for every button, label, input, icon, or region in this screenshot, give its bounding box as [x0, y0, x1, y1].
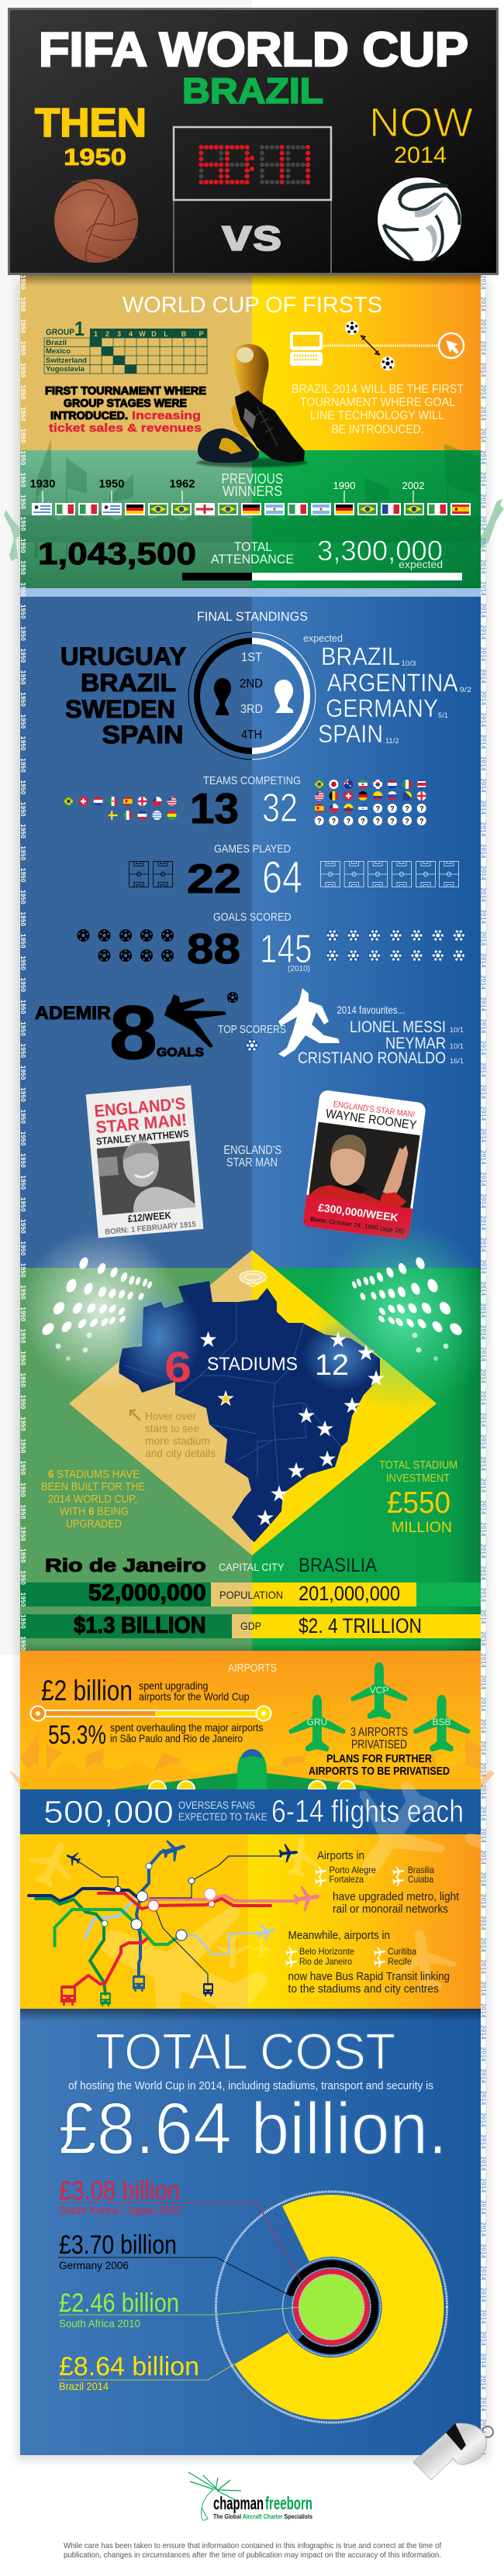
stat: total attendance: 3,300,000: [317, 535, 443, 567]
group table: Yugoslavia: [46, 365, 85, 373]
card: stanley matthews: BORN: 1 FEBRUARY 1915: [105, 1221, 197, 1237]
text: 3 airports privatised: PLANS FOR FURTHER: [326, 1752, 432, 1765]
band: overseas fans: EXPECTED TO TAKE: [178, 1810, 267, 1823]
planes: privatised airports: GRU: [307, 1717, 327, 1727]
heading: england's star man: STAR MAN: [226, 1156, 278, 1169]
row: population: POPULATION: [219, 1589, 283, 1601]
stat: 2 billion: [41, 1675, 250, 1706]
2014 expected standings: 9/2: [460, 686, 471, 694]
icon: 1950 leather football: [54, 179, 138, 263]
chart label: 2.46 billion: South Africa 2010: [59, 2317, 140, 2330]
row: capital city: CAPITAL CITY: [219, 1561, 285, 1573]
icon: stadium: [240, 1271, 266, 1286]
stat: games 22: 22: [187, 856, 241, 902]
timeline of winner flags: 1962: [169, 477, 195, 491]
label: then 1950: 1950: [64, 143, 126, 170]
group table: 4: [129, 330, 133, 338]
logo mark: [188, 2472, 241, 2520]
hover hint: more stadium: [145, 1434, 210, 1447]
heading: top scorers: [218, 1023, 286, 1052]
band: overseas fans: [20, 1789, 481, 1834]
metro plane icons: [64, 1835, 321, 1944]
chart label: 3.70 billion: [58, 2230, 292, 2296]
text: airports with bus rapid transit: Curitiba: [388, 1946, 416, 1957]
text: 3 airports privatised: PRIVATISED: [351, 1738, 407, 1751]
text: first tournament group stages: Increasing: [132, 409, 201, 422]
arms outside panel: [4, 498, 504, 561]
planes: privatised airports: BSB: [432, 1717, 451, 1727]
row: population: 52,000,000: [88, 1580, 206, 1606]
stadium location stars: ★: [356, 1341, 376, 1365]
stat: goals 88: [78, 925, 240, 973]
top scorers 2014: [278, 988, 464, 1067]
stat: goals 145: [260, 927, 465, 973]
2014 expected standings: expected: [303, 632, 343, 644]
floodlight glows: [19, 1221, 492, 1414]
stat: 2 billion: airports for the World Cup: [139, 1690, 250, 1703]
text: 3 airports privatised: [309, 1726, 450, 1778]
stat: 55.3 percent: [48, 1720, 264, 1750]
icon: computer goal-line technology: [290, 321, 464, 370]
timeline of winner flags: 1990: [333, 480, 355, 491]
text: airports with bus rapid transit: Belo Horizonte: [299, 1946, 354, 1957]
card: wayne rooney: ENGLAND'S STAR MAN!: [333, 1100, 416, 1120]
text: airports with metro: Brasilia: [408, 1865, 434, 1875]
group table: B: [181, 330, 187, 338]
text: 3 airports privatised: AIRPORTS TO BE PRIVATISED: [309, 1765, 450, 1778]
text: brazil 2014 goal line technology: [292, 383, 464, 436]
standings circle: [188, 632, 316, 759]
text: airports with metro: rail or monorail networks: [333, 1903, 448, 1916]
panel: stadiums: [19, 1221, 492, 1651]
stat: stadiums 6 vs 12: 12: [315, 1349, 349, 1382]
heading: world cup of firsts: WORLD CUP OF FIRSTS: [123, 293, 382, 318]
chart label: 8.64 billion: £8.64 billion: [59, 2352, 199, 2381]
planes: privatised airports: [288, 1662, 470, 1751]
standings circle: 3RD: [240, 703, 263, 716]
group table: 1: [74, 317, 85, 340]
stat: total stadium investment: INVESTMENT: [386, 1472, 450, 1485]
floodlights: [40, 1256, 464, 1361]
group table: L: [164, 330, 168, 338]
group table: Switzerland: [46, 356, 87, 364]
2014 expected standings: GERMANY: [326, 694, 438, 722]
metro map lines: [29, 1847, 296, 1994]
timeline of winner flags: 1950: [99, 477, 124, 491]
top scorers 2014: 2014 favourites...: [337, 1004, 405, 1016]
card: stanley matthews: STAR MAN!: [95, 1110, 188, 1137]
stat: 55.3 percent: in São Paulo and Rio de Janeiro: [110, 1732, 243, 1744]
2014 expected standings: 5/1: [438, 711, 448, 719]
stat: 2 billion: £2 billion: [41, 1675, 133, 1706]
2014 expected standings: [303, 632, 471, 748]
card: wayne rooney: Born: October 24, 1985 (age 28): [310, 1216, 405, 1235]
bus icons: [60, 1975, 213, 2006]
top scorers 2014: NEYMAR: [385, 1035, 446, 1052]
stat: teams 32: [262, 780, 426, 831]
stadium location stars: ★: [296, 1403, 316, 1427]
top scorers 2014: CRISTIANO RONALDO: [298, 1049, 446, 1067]
chart label: 8.64 billion: [58, 2352, 235, 2392]
stat: total attendance: ATTENDANCE: [211, 552, 294, 567]
chart label: 3.08 billion: £3.08 billion: [59, 2176, 180, 2206]
stat: total stadium investment: [379, 1458, 457, 1536]
logo: chapman freeborn: [188, 2472, 312, 2520]
hover hint: stars to see: [145, 1422, 199, 1434]
logo: chapman freeborn: The Global Aircraft Charter Specialists: [213, 2513, 312, 2520]
band: overseas fans: 6-14 flights each: [271, 1793, 464, 1829]
panel: world cup of firsts: [20, 275, 481, 450]
logo: chapman freeborn: freeborn: [265, 2493, 312, 2513]
text: airports with metro: Airports in: [317, 1849, 364, 1862]
row: gdp: $2. 4 TRILLION: [299, 1614, 422, 1638]
text: first tournament group stages: [45, 384, 206, 435]
stat: 55.3 percent: spent overhauling the major airports: [110, 1721, 264, 1734]
text: brazil 2014 goal line technology: TOURNAMENT WHERE GOAL: [300, 396, 455, 409]
standings circle: 4TH: [241, 728, 262, 742]
heading: total cost: TOTAL COST: [95, 2023, 395, 2080]
heading: previous winners: [222, 471, 283, 499]
stat: total stadium investment: TOTAL STADIUM: [379, 1458, 457, 1472]
text: 6 stadiums built: WITH 6 BEING: [60, 1505, 129, 1518]
stat: goals 145: (2010): [288, 965, 310, 973]
stat: total attendance: TOTAL: [234, 539, 272, 554]
1950 final standings: SPAIN: [102, 721, 183, 749]
text: airports with bus rapid transit: Rio de Janeiro: [299, 1956, 352, 1967]
2014 expected standings: 11/2: [385, 737, 399, 745]
stat: goals 88: 88: [187, 925, 240, 973]
stat: total attendance: expected: [399, 558, 443, 570]
disclaimer: [64, 2541, 441, 2560]
text: brazil 2014 goal line technology: BRAZIL 2014 WILL BE THE FIRST: [292, 383, 464, 396]
big plane: [112, 1749, 392, 1789]
heading: final standings: FINAL STANDINGS: [197, 609, 308, 624]
photo: wayne rooney: [309, 1122, 420, 1211]
stadium location stars: ★: [198, 1328, 218, 1352]
panel: total cost: [20, 2009, 481, 2455]
text: brazil 2014 goal line technology: BE INTRODUCED.: [332, 423, 423, 436]
hover hint: [130, 1410, 216, 1459]
group table: [44, 317, 207, 374]
text: first tournament group stages: ticket sales & revenues: [49, 422, 202, 435]
chart label: 2.46 billion: £2.46 billion: [59, 2288, 179, 2318]
text: 6 stadiums built: 6 STADIUMS HAVE: [48, 1468, 140, 1481]
timeline of winner flags: 2002: [402, 480, 424, 491]
disclaimer: While care has been taken to ensure that information contained in this infographic is true and correct at the time of: [64, 2541, 441, 2550]
heading: teams competing: TEAMS COMPETING: [203, 774, 301, 787]
donut chart: [216, 2192, 447, 2423]
background planes: [22, 1763, 504, 2086]
text: first tournament group stages: INTRODUCED.: [50, 409, 128, 422]
card: stanley matthews: ENGLAND'S: [93, 1093, 186, 1121]
row: capital city: [45, 1555, 377, 1576]
heading: top scorers: TOP SCORERS: [218, 1023, 286, 1036]
heading: previous winners: PREVIOUS: [222, 471, 283, 487]
group table: 1: [94, 330, 98, 338]
text: airports with metro: [315, 1849, 460, 1916]
label: now 2014: NOW: [369, 100, 473, 146]
crowd silhouette: [9, 1730, 495, 1789]
stadium location stars: ★: [255, 1506, 275, 1530]
row: population: 201,000,000: [299, 1582, 400, 1605]
text: first tournament group stages: GROUP STAGES WERE: [64, 397, 187, 410]
text: first tournament group stages: FIRST TOURNAMENT WHERE: [45, 384, 206, 398]
stat: total attendance: 1,043,500: [38, 537, 196, 571]
logo: chapman freeborn: chapman: [213, 2493, 264, 2513]
text: 6 stadiums built: 2014 WORLD CUP,: [48, 1493, 137, 1506]
top scorer 1950: [35, 990, 238, 1075]
band: overseas fans: 500,000: [43, 1794, 174, 1830]
heading: goals scored: GOALS SCORED: [213, 911, 292, 924]
icon: 2014 football: [378, 177, 461, 261]
chart label: 2.46 billion: [58, 2288, 299, 2330]
flag diamond: [69, 1250, 437, 1555]
group table: P: [198, 330, 204, 338]
stat: stadiums 6 vs 12: 6: [164, 1342, 192, 1391]
heading: england's star man: [223, 1144, 281, 1169]
icon: world cup trophy and boots: [196, 344, 308, 467]
text: airports with bus rapid transit: to the stadiums and city centres: [288, 1982, 439, 1996]
group table: GROUP: [46, 328, 74, 337]
text: airports with metro: Porto Alegre: [329, 1865, 376, 1875]
planes: privatised airports: VCP: [370, 1685, 388, 1696]
1950 final standings: [60, 642, 186, 749]
disclaimer: publication, changes in circumstances after the time of publication may impact on the accuracy of this information.: [64, 2550, 441, 2560]
row: gdp: [20, 1613, 481, 1638]
2014 expected standings: 10/3: [402, 659, 416, 667]
text: airports with bus rapid transit: Recife: [388, 1956, 412, 1967]
label: now 2014: [369, 100, 473, 168]
timeline of winner flags: 1930: [29, 477, 56, 491]
text: 6 stadiums built: UPGRADED: [66, 1517, 122, 1531]
row: gdp: GDP: [240, 1620, 261, 1632]
title: FIFA WORLD CUP: [39, 23, 468, 77]
stadium location stars: ★: [315, 1417, 335, 1441]
chart label: 3.08 billion: South Korea / Japan 2002: [59, 2204, 182, 2216]
stat: stadiums 6 vs 12: [164, 1342, 349, 1391]
subtitle: brazil: BRAZIL: [182, 71, 323, 111]
row: capital city: BRASILIA: [299, 1555, 377, 1576]
stat: total stadium investment: MILLION: [392, 1520, 452, 1536]
label: then 1950: [35, 101, 147, 170]
chart label: 3.70 billion: Germany 2006: [59, 2259, 129, 2271]
group table: 2: [105, 330, 109, 338]
top scorer 1950: 8: [109, 990, 157, 1075]
stadium location stars: ★: [286, 1458, 306, 1483]
progress bar: [31, 1706, 271, 1720]
1950 final standings: BRAZIL: [81, 669, 176, 697]
year strip: 1950: 1950 1950 1950 1950 1950 1950 1950 1950 1950 1950 1950 1950 1950 1950 1950 1950 1950 1950 1950 1950 1950 1950 1950 1950 1950 1950 1950 1950 1950 1950 1950 1950 1950 1950 1950 1950 1950 1950 1950 1950 1950 1950 1950 1950 1950 1950 1950 1950 1950 1950 1950 1950 1950 1950 1950 1950 1950 1950 1950 1950 1950 1950 1950: [19, 275, 26, 1651]
stadium location stars: ★: [317, 1447, 337, 1471]
row: population: [20, 1580, 481, 1607]
icon: whistle: [413, 2423, 493, 2480]
panel: previous winners and attendance: [4, 439, 504, 588]
row: capital city: Rio de Janeiro: [45, 1555, 206, 1576]
stadium location stars: ★: [366, 1366, 386, 1390]
group table: D: [151, 330, 157, 338]
photo: stanley matthews: [96, 1136, 195, 1215]
text: 3 airports privatised: 3 AIRPORTS: [350, 1726, 408, 1739]
stat: total attendance: [38, 535, 462, 580]
panel: airports: [9, 1651, 495, 1789]
group table: W: [139, 330, 146, 338]
stat: games 64: [262, 852, 459, 903]
heading: games played: GAMES PLAYED: [214, 842, 291, 856]
1950 final standings: URUGUAY: [60, 642, 186, 670]
stat: games 64: 64: [262, 852, 302, 903]
standings circle: 1ST: [241, 651, 262, 664]
stat: games 22: [129, 856, 241, 902]
stat: 2 billion: spent upgrading: [139, 1679, 208, 1692]
2014 expected standings: ARGENTINA: [327, 669, 458, 697]
card: wayne rooney: £300,000/WEEK: [317, 1201, 399, 1224]
card: stanley matthews: STANLEY MATTHEWS: [95, 1128, 189, 1147]
text: 6 stadiums built: BEEN BUILT FOR THE: [41, 1480, 145, 1493]
stadium location stars: ★: [216, 1386, 236, 1410]
metro stations: [102, 1863, 216, 1941]
heading: airports: AIRPORTS: [228, 1662, 277, 1675]
stadium location stars: ★: [269, 1482, 289, 1506]
stadium location stars: [198, 1328, 386, 1530]
led clock: [198, 144, 310, 185]
text: airports with metro: have upgraded metro, light: [333, 1890, 460, 1903]
band: overseas fans: OVERSEAS FANS: [178, 1799, 255, 1811]
top scorer 1950: GOALS: [157, 1046, 204, 1059]
card: stanley matthews: £12/WEEK: [127, 1209, 172, 1224]
group table: Brazil: [46, 339, 67, 346]
hover hint: Hover over: [145, 1410, 196, 1422]
top scorers 2014: LIONEL MESSI: [350, 1018, 446, 1036]
2014 expected standings: SPAIN: [318, 720, 383, 748]
text: airports with bus rapid transit: Meanwhile, airports in: [288, 1929, 390, 1942]
text: 6 stadiums built: [41, 1468, 145, 1531]
stadium location stars: ★: [328, 1328, 348, 1352]
group table: 3: [117, 330, 121, 338]
heading: england's star man: ENGLAND'S: [223, 1144, 281, 1157]
text: airports with bus rapid transit: [285, 1929, 450, 1996]
stat: total stadium investment: £550: [387, 1486, 450, 1520]
stat: 8.64 billion: £8.64 billion.: [58, 2088, 447, 2170]
card: stanley matthews: [86, 1085, 203, 1238]
panel: blue comparison: [20, 588, 481, 1268]
standings circle: 2ND: [240, 677, 263, 690]
stat: teams 13: [64, 784, 239, 832]
top scorers 2014: 10/1: [450, 1026, 464, 1034]
highlighted star: ★: [219, 1391, 232, 1407]
text: airports with metro: Fortaleza: [329, 1874, 364, 1885]
panel: metro and transit: [20, 1763, 504, 2086]
top scorers 2014: 10/1: [450, 1042, 464, 1050]
hover hint: and city details: [145, 1447, 216, 1459]
text: airports with bus rapid transit: now have Bus Rapid Transit linking: [288, 1970, 450, 1983]
card: wayne rooney: WAYNE ROONEY: [325, 1107, 418, 1132]
stat: teams 32: 32: [262, 786, 298, 831]
stat: 55.3 percent: 55.3%: [48, 1720, 106, 1750]
text: of hosting: of hosting the World Cup in 2014, including stadiums, transport and security is: [68, 2079, 433, 2092]
stat: teams 13: 13: [190, 784, 239, 832]
year strip: 2014: 2014 2014 2014 2014 2014 2014 2014 2014 2014 2014 2014 2014 2014 2014 2014 2014 2014 2014 2014 2014 2014 2014 2014 2014 2014 2014 2014 2014 2014 2014 2014 2014 2014 2014 2014 2014 2014 2014 2014 2014 2014 2014 2014 2014 2014 2014 2014 2014 2014 2014 2014 2014 2014 2014 2014 2014 2014 2014 2014 2014 2014 2014 2014 2014 2014 2014 2014 2014 2014 2014 2014 2014 2014 2014 2014 2014 2014 2014 2014 2014 2014 2014 2014 2014 2014 2014 2014 2014 2014 2014 2014 2014 2014 2014 2014 2014 2014 2014 2014 2014: [479, 275, 487, 2456]
group table: Mexico: [46, 347, 71, 355]
1950 final standings: SWEDEN: [65, 695, 175, 723]
stadium location stars: ★: [342, 1393, 362, 1417]
timeline of winner flags: [29, 477, 471, 515]
chart label: 3.70 billion: £3.70 billion: [59, 2230, 177, 2260]
label: vs: vs: [222, 210, 282, 260]
text: brazil 2014 goal line technology: LINE TECHNOLOGY WILL: [310, 409, 444, 422]
top scorer 1950: ADEMIR: [35, 1003, 111, 1024]
label: now 2014: 2014: [394, 143, 447, 168]
scoreboard frame: [174, 127, 331, 274]
text: airports with metro: Cuiaba: [408, 1874, 433, 1885]
stat: goals 145: 145: [260, 927, 312, 972]
stat: stadiums 6 vs 12: STADIUMS: [207, 1354, 298, 1375]
chart label: 3.08 billion: [58, 2176, 301, 2281]
label: then 1950: THEN: [35, 101, 147, 146]
top scorers 2014: 16/1: [450, 1057, 464, 1065]
card: wayne rooney: [302, 1090, 426, 1240]
2014 expected standings: BRAZIL: [321, 642, 400, 670]
panel: header scoreboard: [9, 9, 498, 274]
map of brazil: [116, 1281, 380, 1542]
chart label: 8.64 billion: Brazil 2014: [59, 2380, 109, 2392]
heading: previous winners: WINNERS: [223, 484, 282, 499]
row: gdp: $1.3 BILLION: [74, 1613, 206, 1638]
